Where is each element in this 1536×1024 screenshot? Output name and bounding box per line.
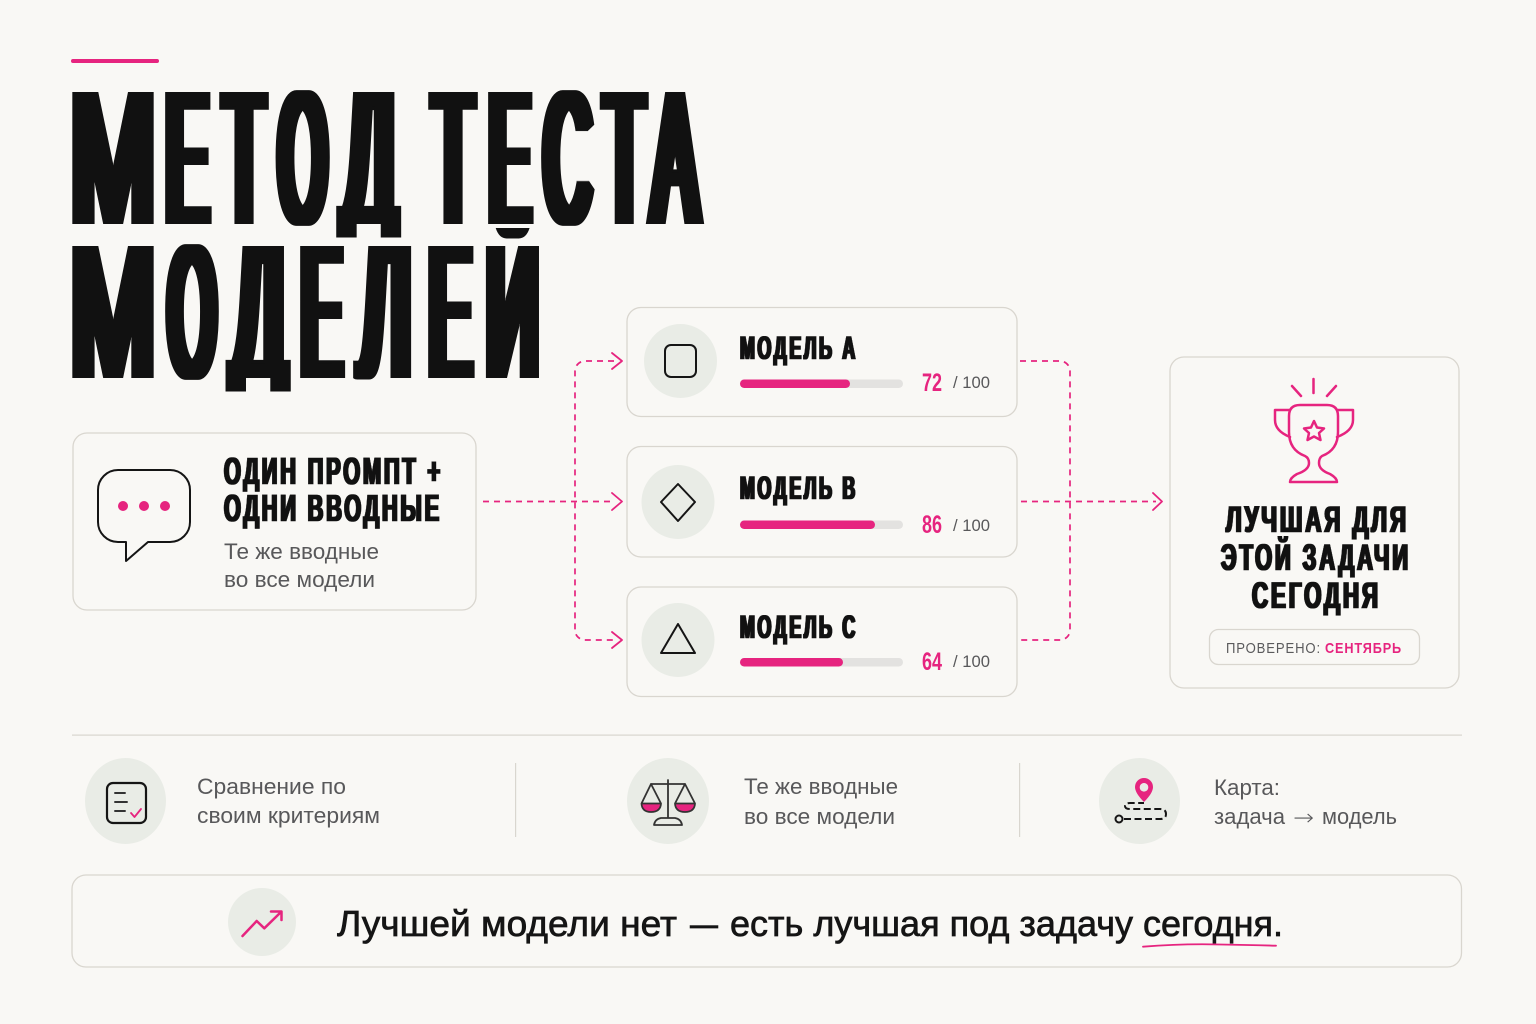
icon: trophy xyxy=(1275,379,1353,482)
model B score xyxy=(922,511,990,539)
divider xyxy=(72,734,1462,736)
task map text xyxy=(1214,775,1397,831)
panel: winner xyxy=(1170,357,1459,688)
title: Й xyxy=(487,206,538,416)
panel: model C xyxy=(627,587,1017,696)
same inputs text xyxy=(744,774,898,829)
model C score: / 100 xyxy=(953,652,990,671)
model B score bar xyxy=(740,520,903,529)
criteria text: своим критериям xyxy=(197,803,380,828)
same inputs text: Те же вводные xyxy=(744,774,898,799)
icon: diamond xyxy=(642,465,714,539)
model C label: МОДЕЛЬ С xyxy=(740,609,858,645)
model A score xyxy=(922,369,990,397)
input description xyxy=(224,539,379,592)
model C score xyxy=(922,648,990,676)
arrows: models to winner xyxy=(1020,361,1162,640)
title: Т xyxy=(224,53,264,262)
icon: square xyxy=(644,324,717,398)
icon: speech bubble xyxy=(98,470,190,561)
takeaway text: сегодня. xyxy=(1143,903,1283,944)
title: Л xyxy=(359,207,411,416)
title: Е xyxy=(167,53,208,262)
model C score: 64 xyxy=(922,648,942,676)
title: Д xyxy=(232,207,286,416)
model B score: 86 xyxy=(922,511,942,539)
date badge: СЕНТЯБРЬ xyxy=(1325,640,1402,657)
title: Е xyxy=(490,53,530,262)
task map text: задача xyxy=(1214,804,1286,829)
winner heading xyxy=(1221,499,1411,616)
title xyxy=(72,90,704,392)
model B score: / 100 xyxy=(953,516,990,535)
feature: same inputs xyxy=(627,758,898,844)
model B label: МОДЕЛЬ В xyxy=(740,470,858,506)
date badge xyxy=(1210,630,1420,664)
title: М xyxy=(71,207,155,416)
criteria text xyxy=(197,774,380,828)
title: Д xyxy=(342,53,396,262)
underline accent xyxy=(1143,944,1276,947)
panel: input prompt xyxy=(73,433,476,610)
takeaway text: Лучшей модели нет xyxy=(337,903,677,944)
task map text: → xyxy=(1293,806,1314,831)
title: С xyxy=(544,53,590,262)
icon: scales xyxy=(627,758,709,844)
title: Т xyxy=(605,53,644,262)
icon: trend up xyxy=(228,888,296,956)
winner heading: СЕГОДНЯ xyxy=(1252,575,1381,616)
date badge: ПРОВЕРЕНО: xyxy=(1226,640,1321,657)
title: Е xyxy=(302,207,341,416)
task map text: Карта: xyxy=(1214,775,1280,800)
winner heading: ЛУЧШАЯ ДЛЯ xyxy=(1226,499,1409,540)
model A score: 72 xyxy=(922,369,942,397)
feature: task map xyxy=(1099,758,1397,844)
task map text: модель xyxy=(1322,804,1397,829)
icon: triangle xyxy=(642,603,714,677)
title: М xyxy=(71,53,155,262)
title: О xyxy=(279,53,326,262)
input heading xyxy=(224,451,443,530)
input heading: ОДНИ ВВОДНЫЕ xyxy=(224,488,442,530)
accent bar xyxy=(71,59,159,63)
model A score: / 100 xyxy=(953,373,990,392)
model A score bar xyxy=(740,380,903,388)
title: Т xyxy=(433,53,473,262)
title: О xyxy=(169,207,215,416)
same inputs text: во все модели xyxy=(744,804,895,829)
input description: Те же вводные xyxy=(224,539,379,564)
takeaway text: есть лучшая под задачу xyxy=(730,903,1133,944)
feature: criteria xyxy=(85,758,380,844)
input heading: ОДИН ПРОМПТ + xyxy=(224,451,443,493)
text: А xyxy=(653,53,698,262)
icon: map pin xyxy=(1099,758,1180,844)
panel: model A xyxy=(627,308,1017,416)
winner heading: ЭТОЙ ЗАДАЧИ xyxy=(1221,536,1411,578)
model C score bar xyxy=(740,658,903,666)
model A label: МОДЕЛЬ А xyxy=(740,330,858,366)
icon: checklist xyxy=(85,758,166,844)
title: Е xyxy=(430,207,471,416)
criteria text: Сравнение по xyxy=(197,774,346,799)
arrows: input to models xyxy=(483,353,622,648)
panel: takeaway xyxy=(72,875,1462,967)
takeaway text: — xyxy=(690,903,718,944)
panel: model B xyxy=(627,446,1017,557)
input description: во все модели xyxy=(224,567,375,592)
